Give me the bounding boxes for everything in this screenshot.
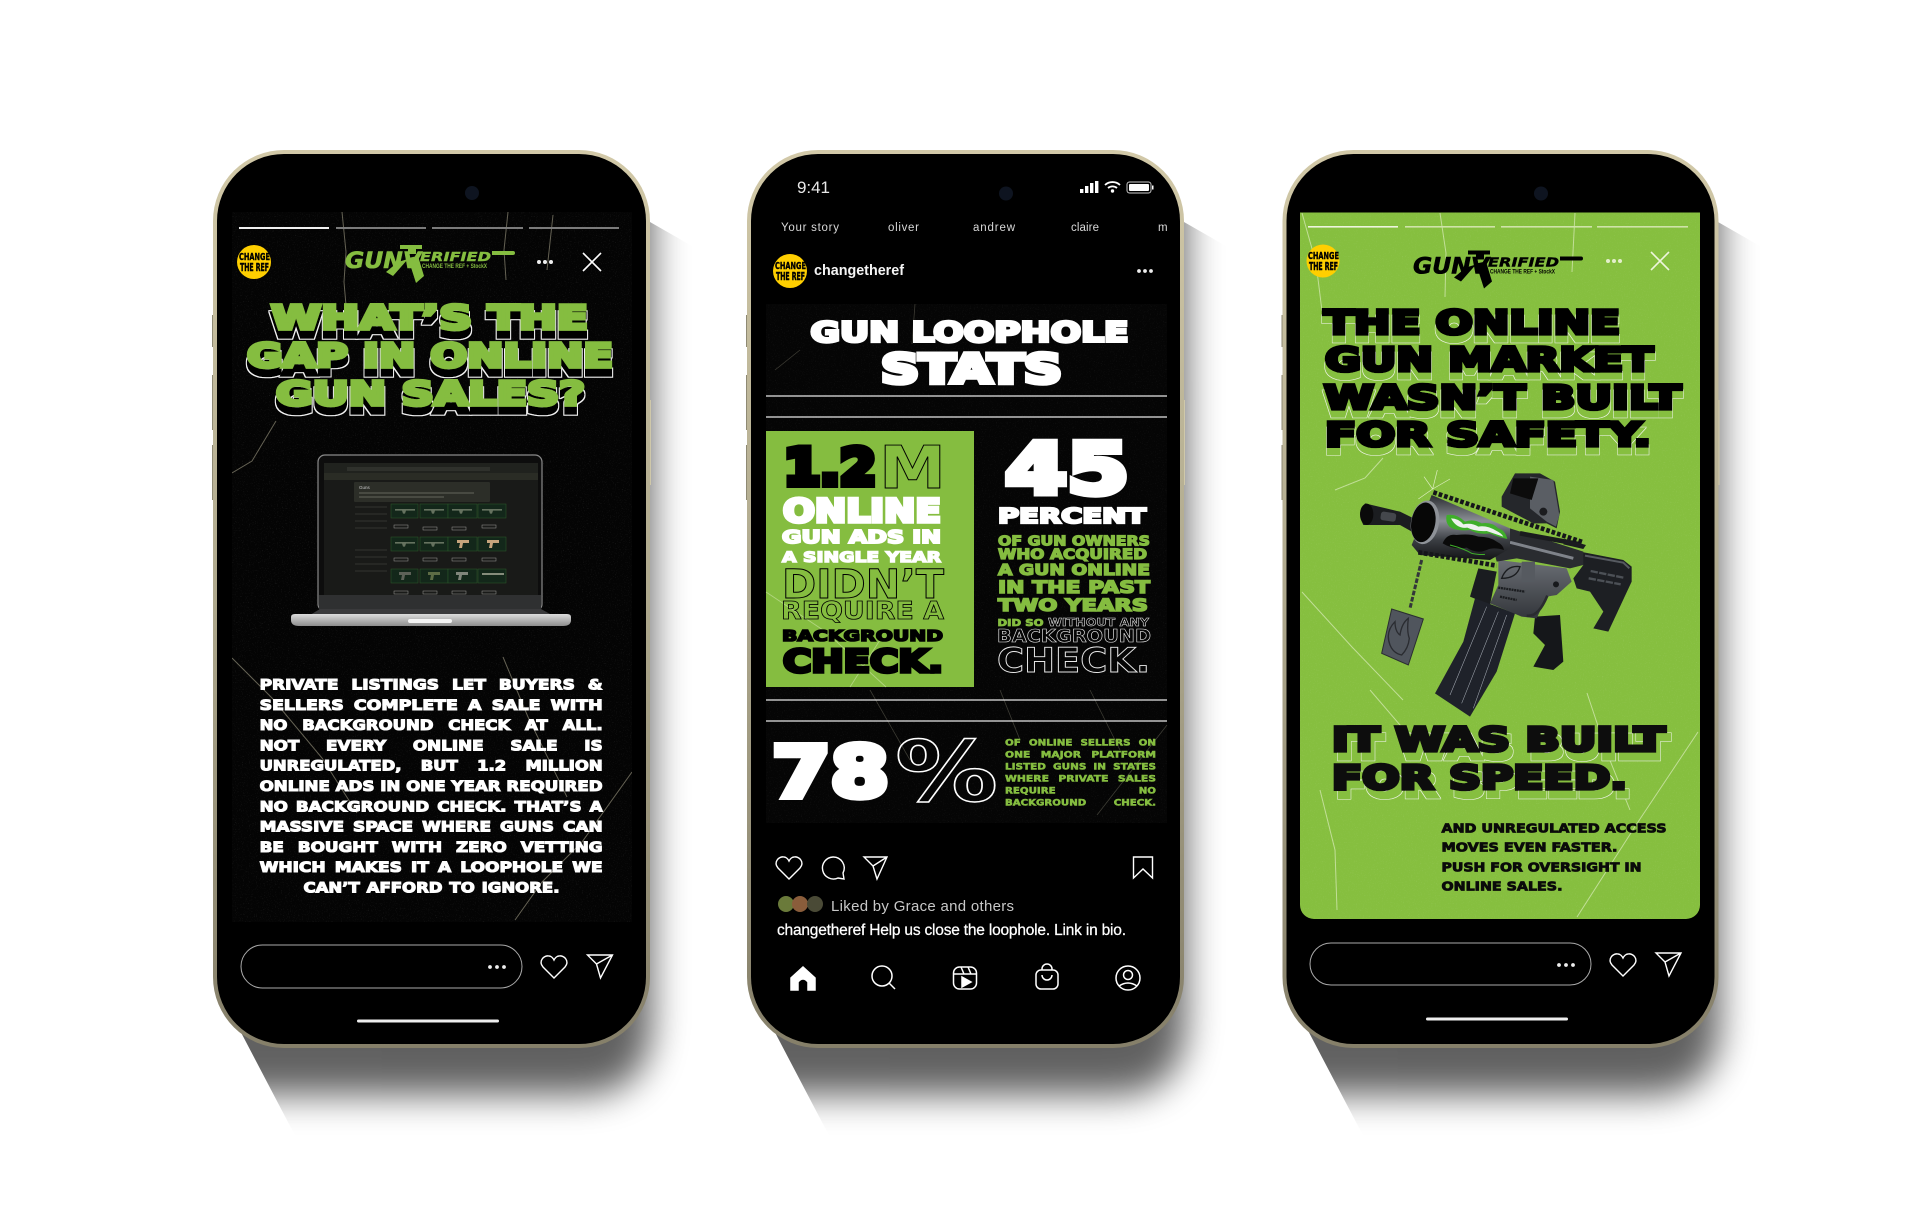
close icon <box>1651 252 1669 270</box>
title: GUN LOOPHOLE <box>810 316 1128 348</box>
panel: 1.2M green: CHECK. <box>783 644 943 680</box>
phone frame <box>1282 150 1720 1048</box>
icon: comment <box>822 857 844 879</box>
body text: WHICH MAKES IT A LOOPHOLE WE <box>260 860 603 876</box>
panel: 45 percent: PERCENT <box>998 504 1146 528</box>
body text: BE BOUGHT WITH ZERO VETTING <box>260 840 603 856</box>
logo: Gun Verified <box>345 245 515 283</box>
stat: 78 percent description: WHERE PRIVATE SALES <box>1005 774 1156 784</box>
story menu dots <box>1606 259 1622 263</box>
heading <box>1324 303 1682 454</box>
stat: 78 percent <box>772 723 998 821</box>
heading: GUN SALES? <box>276 374 585 413</box>
magazine <box>1435 568 1515 717</box>
icon: heart <box>541 956 567 978</box>
panel: 1.2M green: REQUIRE A <box>781 596 945 625</box>
title <box>810 316 1128 393</box>
camera <box>1534 186 1548 200</box>
heading: GAP IN ONLINE <box>247 336 613 375</box>
brand avatar <box>1306 244 1340 278</box>
stories row: claire <box>1071 222 1099 234</box>
panel: 45 percent: 45 <box>1005 428 1129 510</box>
phone 3: story with gun <box>1282 150 1720 1048</box>
panel: 1.2M green: DIDN’T <box>782 562 945 608</box>
body text: AND UNREGULATED ACCESS <box>1442 822 1666 836</box>
heading: GUN MARKET <box>1325 340 1654 379</box>
stories row: andrew <box>973 222 1016 234</box>
heading: WHAT’S THE <box>271 298 588 337</box>
logo: Gun Verified: ERIFIED <box>1488 254 1559 270</box>
body text: MOVES EVEN FASTER. <box>1442 840 1618 854</box>
body text: ONLINE SALES. <box>1442 880 1562 894</box>
panel: 45 percent: DID SO <box>998 618 1044 629</box>
story menu dots <box>537 260 553 264</box>
upper receiver <box>1493 528 1583 568</box>
body text: MASSIVE SPACE WHERE GUNS CAN <box>260 820 603 836</box>
stat: 78 percent: 78 <box>772 732 889 814</box>
phone frame <box>746 150 1185 1048</box>
rails <box>1433 492 1583 542</box>
panel: 45 percent <box>997 428 1151 681</box>
story background <box>232 212 632 922</box>
status icons <box>1080 181 1154 193</box>
stat: 78 percent description: LISTED GUNS IN STATES <box>1005 762 1156 772</box>
stat: 78 percent description: ONE MAJOR PLATFORM <box>1005 750 1156 760</box>
brand avatar: CHANGE <box>775 261 806 272</box>
stories row: m <box>1158 222 1168 234</box>
message input <box>1310 943 1591 985</box>
brand avatar: THE REF <box>240 261 269 274</box>
stories row: Your story <box>781 222 839 234</box>
handguard <box>1412 495 1510 560</box>
story background <box>1300 212 1700 919</box>
logo: Gun Verified: CHANGE THE REF + StockX <box>1490 268 1555 276</box>
body text: CAN’T AFFORD TO IGNORE. <box>304 880 560 896</box>
heading: THE ONLINE <box>1324 303 1620 342</box>
panel: 45 percent: TWO YEARS <box>998 596 1148 616</box>
liked by text: Liked by Grace and others <box>831 898 1014 915</box>
stat: 78 percent description <box>1005 738 1156 808</box>
body text: NOT EVERY ONLINE SALE IS <box>260 738 603 754</box>
chain <box>1410 560 1422 608</box>
body text <box>1442 822 1666 894</box>
optic sight <box>1502 473 1560 528</box>
panel: 1.2M green: A SINGLE YEAR <box>782 550 941 566</box>
subheading: IT WAS BUILT <box>1332 720 1666 759</box>
heading: FOR SAFETY. <box>1325 415 1651 454</box>
panel: 1.2M green: BACKGROUND <box>782 627 943 645</box>
logo: Gun Verified: GUNV <box>345 249 423 274</box>
panel: 45 percent: BACKGROUND <box>997 626 1151 647</box>
navigation bar <box>791 964 1140 990</box>
gun illustration <box>1360 470 1632 717</box>
phone 2: post with stats <box>746 150 1185 1048</box>
username: changetheref <box>814 262 905 279</box>
icon: send <box>1656 953 1681 976</box>
body text: UNREGULATED, BUT 1.2 MILLION <box>260 759 603 775</box>
brand avatar: CHANGE <box>1308 251 1339 262</box>
close icon <box>583 253 601 271</box>
panel: 1.2M green: M <box>879 433 946 502</box>
divider rules <box>766 396 1167 721</box>
icon: heart <box>776 857 802 879</box>
stories row <box>781 222 1168 234</box>
heading: WASN’T BUILT <box>1324 378 1682 417</box>
post background <box>766 304 1167 823</box>
shadow: phone 2 <box>714 180 1186 1095</box>
subheading <box>1332 720 1666 797</box>
laptop mockup: Guns <box>359 485 371 490</box>
laptop mockup <box>291 455 571 626</box>
brand avatar: CHANGE <box>239 252 270 263</box>
post menu dots <box>1137 269 1153 273</box>
stories row: oliver <box>888 222 919 234</box>
panel: 1.2M green: 1.2 <box>784 438 876 496</box>
home indicator <box>357 1020 499 1022</box>
panel: 1.2M green: ONLINE <box>783 492 941 530</box>
lower receiver <box>1490 560 1572 618</box>
body text: ONLINE ADS IN ONE YEAR REQUIRED <box>260 779 603 795</box>
panel: 45 percent: CHECK. <box>997 641 1150 681</box>
stock <box>1572 550 1632 632</box>
camera <box>999 186 1013 200</box>
shadow: phone 3 <box>1248 180 1720 1095</box>
panel: 1.2M green <box>766 431 974 687</box>
barrel mouth <box>1407 498 1443 546</box>
status time: 9:41 <box>797 178 830 197</box>
title: STATS <box>881 347 1062 393</box>
body text: NO BACKGROUND CHECK. THAT’S A <box>260 799 603 815</box>
panel: 45 percent: A GUN ONLINE <box>998 561 1150 579</box>
liked-by avatars <box>778 896 823 912</box>
dog tag <box>1382 609 1423 665</box>
panel: 45 percent: WHO ACQUIRED <box>998 547 1147 563</box>
camera <box>465 186 479 200</box>
icon: send <box>588 955 612 978</box>
stat: 78 percent description: BACKGROUND CHECK. <box>1005 798 1156 808</box>
logo: Gun Verified: GUNV <box>1413 254 1491 280</box>
body text: NO BACKGROUND CHECK AT ALL. <box>260 718 603 734</box>
logo: Gun Verified: CHANGE THE REF + StockX <box>422 263 487 270</box>
shadow: phone 1 <box>180 180 652 1095</box>
logo: Gun Verified <box>1413 250 1583 288</box>
caption: changetheref Help us close the loophole. Link in bio. <box>777 922 1126 939</box>
progress bars <box>239 227 619 229</box>
stat: 78 percent: % <box>895 723 998 821</box>
brand avatar <box>237 245 271 279</box>
brand avatar: THE REF <box>776 270 805 283</box>
body text: PRIVATE LISTINGS LET BUYERS & <box>260 678 603 694</box>
home indicator <box>1426 1018 1568 1020</box>
panel: 1.2M green: GUN ADS IN <box>782 527 941 548</box>
progress bars <box>1308 226 1688 228</box>
body text: SELLERS COMPLETE A SALE WITH <box>260 698 603 714</box>
body text <box>260 678 603 896</box>
stat: 78 percent description: OF ONLINE SELLERS ON <box>1005 738 1156 748</box>
heading <box>247 298 613 413</box>
flames <box>1443 515 1507 555</box>
phone frame <box>212 150 651 1048</box>
icon: heart <box>1610 954 1636 976</box>
brand avatar <box>773 254 807 288</box>
brand avatar: THE REF <box>1309 260 1338 273</box>
muzzle <box>1360 503 1415 533</box>
panel: 45 percent: OF GUN OWNERS <box>998 534 1150 550</box>
icon: send <box>864 857 887 879</box>
logo: Gun Verified: ERIFIED <box>420 249 491 264</box>
body text: PUSH FOR OVERSIGHT IN <box>1442 860 1642 874</box>
panel: 45 percent: IN THE PAST <box>998 578 1151 598</box>
subheading: FOR SPEED. <box>1332 758 1627 797</box>
grip <box>1533 615 1563 670</box>
message input <box>241 945 522 988</box>
panel: 45 percent: WITHOUT ANY <box>1048 616 1150 629</box>
phone 1: story with laptop <box>212 150 651 1048</box>
icon: bookmark <box>1134 857 1152 878</box>
stat: 78 percent description: REQUIRE NO <box>1005 786 1156 796</box>
